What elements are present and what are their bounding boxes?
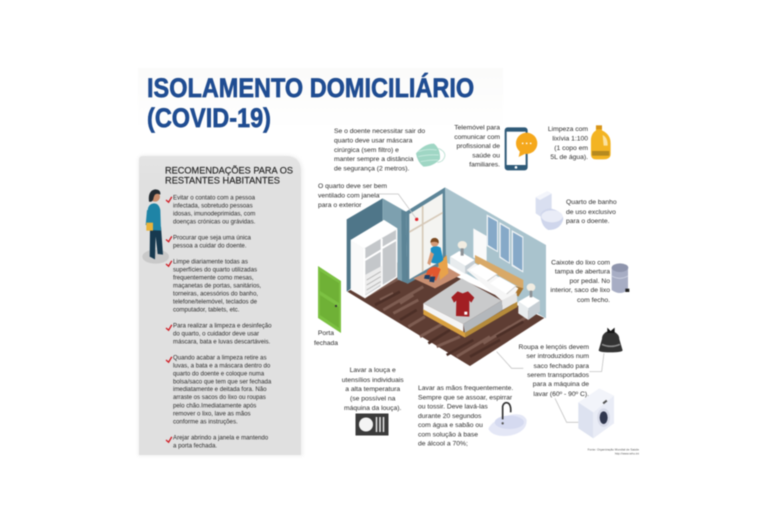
- icon: mobile phone with speech bubble: [506, 128, 537, 169]
- text: mobile phone: Telemóvel para: [454, 124, 500, 132]
- icon: garbage bag: [599, 328, 623, 352]
- recommendation 1: Evitar o contato com a pessoa: [173, 194, 256, 201]
- recommendation 3: superfícies do quarto utilizadas: [173, 266, 257, 274]
- text: wash hands: Sempre que se assoar, espirrar: [418, 395, 513, 402]
- recommendation 5: quarto do doente e coloque numa: [173, 370, 265, 377]
- text: pedal bin: com fecho.: [577, 297, 610, 304]
- recommendation 3: telefone/telemóvel, teclados de: [173, 298, 258, 305]
- recommendation 3: computador, tablets, etc.: [173, 306, 240, 314]
- text: wash hands: [418, 385, 513, 448]
- recommendation 2: Procurar que seja uma única: [173, 234, 252, 241]
- text: wash dishes: Lavar a louça e: [350, 367, 396, 374]
- icon: toilet: [536, 191, 563, 230]
- recommendation 5: arraste os sacos do lixo ou roupas: [173, 394, 266, 401]
- panel heading: [165, 166, 293, 186]
- panel: recommendations for other residents: [138, 155, 303, 456]
- text: exclusive bathroom: [566, 199, 617, 225]
- text: exclusive bathroom: para o doente.: [566, 218, 610, 225]
- icon: pedal bin: [612, 263, 629, 293]
- text: bleach cleaning: [548, 126, 588, 161]
- label: closed door: [314, 330, 338, 347]
- recommendation 4: máscara, bata e luvas descartáveis.: [173, 338, 271, 345]
- text: laundry: lavar (60º - 90º C).: [533, 391, 589, 398]
- text: mobile phone: profissional de: [456, 143, 500, 150]
- text: pedal bin: tampa de abertura: [555, 269, 610, 276]
- text: surgical mask advice: de segurança (2 metros).: [334, 166, 410, 172]
- text: wash hands: ou tossir. Deve lavá-las: [418, 404, 488, 411]
- text: room ventilation: para o exterior: [318, 202, 362, 209]
- text: bleach cleaning: Limpeza com: [548, 126, 588, 133]
- callout lines: [378, 194, 604, 422]
- icon: plate and cutlery: [356, 414, 388, 436]
- text: wash hands: de álcool a 70%;: [418, 441, 468, 448]
- right wall: [445, 187, 546, 318]
- recommendation 6: [166, 434, 269, 449]
- recommendation 1: doenças crónicas ou grávidas.: [173, 218, 256, 226]
- text: mobile phone: saúde ou: [472, 152, 500, 160]
- text: wash dishes: (se possível na: [350, 396, 396, 403]
- text: wash hands: com água e sabão ou: [418, 422, 483, 429]
- recommendation 5: bolsa/saco que tem que ser fechada: [173, 378, 272, 385]
- panel heading: RECOMENDAÇÕES PARA OS: [165, 166, 293, 176]
- text: surgical mask advice: quarto deve usar máscara: [334, 138, 413, 144]
- label: closed door: fechada: [314, 340, 338, 347]
- text: surgical mask advice: [334, 128, 425, 172]
- rug: [413, 265, 461, 288]
- text: surgical mask advice: manter sempre a distância: [334, 156, 414, 163]
- text: wash dishes: a alta temperatura: [345, 386, 400, 393]
- text: laundry: Roupa e lençóis devem: [518, 344, 589, 351]
- bathroom door: [473, 228, 487, 265]
- recommendation 3: torneiras, acessórios do banho,: [173, 290, 258, 298]
- recommendation 5: remover o lixo, lave as mãos: [173, 410, 251, 417]
- panel heading: RESTANTES HABITANTES: [165, 176, 280, 186]
- recommendation 3: [166, 259, 261, 314]
- icon: sink with faucet: [488, 403, 527, 436]
- text: pedal bin: Caixote do lixo com: [551, 260, 610, 267]
- source note: http://www.who.int: [615, 452, 639, 456]
- bed: [423, 255, 523, 338]
- recommendation 2: [166, 234, 252, 250]
- text: bleach cleaning: 5L de água).: [550, 154, 588, 161]
- text: bleach cleaning: (1 copo em: [554, 145, 588, 152]
- title: ISOLAMENTO DOMICILIÁRIO: [147, 73, 474, 103]
- text: wash hands: Lavar as mãos frequentemente.: [418, 385, 513, 392]
- wall windows: [487, 214, 523, 273]
- recommendation 2: pessoa a cuidar do doente.: [173, 242, 247, 250]
- recommendation 3: maçanetas de portas, sanitários,: [173, 282, 261, 290]
- recommendation 3: Limpe diariamente todas as: [173, 259, 248, 266]
- text: wash dishes: utensílios individuais: [342, 377, 404, 384]
- source note: [588, 448, 639, 456]
- recommendation 4: Para realizar a limpeza e desinfeção: [173, 323, 272, 330]
- recommendation 4: do quarto, o cuidador deve usar: [173, 330, 259, 337]
- text: wash hands: durante 20 segundos: [418, 413, 482, 420]
- text: wash hands: com solução à base: [418, 432, 478, 439]
- recommendation 5: luvas, a bata e a máscara dentro do: [173, 362, 271, 369]
- text: surgical mask advice: cirúrgica (sem filtro) e: [334, 147, 399, 154]
- left nightstand and lamp: [450, 241, 475, 274]
- window wall: [406, 187, 446, 284]
- text: room ventilation: O quarto deve ser bem: [318, 183, 387, 190]
- icon: surgical mask: [416, 144, 445, 167]
- label: closed door: Porta: [318, 330, 334, 337]
- recommendation 6: Arejar abrindo a janela e mantendo: [173, 434, 269, 441]
- recommendation 5: [166, 355, 272, 425]
- text: room ventilation: ventilado com janela: [318, 192, 380, 200]
- text: mobile phone: comunicar com: [454, 134, 500, 141]
- text: pedal bin: [550, 260, 610, 304]
- recommendation 1: infectada, sobretudo pessoas: [173, 202, 253, 210]
- wardrobe: [351, 220, 397, 298]
- text: laundry: ser introduzidos num: [526, 353, 589, 360]
- recommendation 5: Quando acabar a limpeza retire as: [173, 355, 266, 362]
- text: exclusive bathroom: Quarto de banho: [566, 199, 617, 206]
- title: [147, 73, 474, 133]
- text: wash dishes: máquina da louça).: [344, 405, 402, 412]
- text: pedal bin: por pedal. No: [569, 278, 610, 285]
- text: laundry: saco fechado para: [533, 363, 589, 370]
- recommendation 1: [166, 194, 256, 226]
- icon: bleach bottle: [591, 125, 611, 159]
- text: mobile phone: familiares.: [469, 162, 500, 168]
- person sitting on chair: [424, 238, 448, 282]
- recommendation 5: imediatamente e deitada fora. Não: [173, 386, 267, 393]
- text: bleach cleaning: lixívia 1:100: [552, 136, 588, 143]
- recommendation 6: a porta fechada.: [173, 442, 217, 449]
- recommendation 4: [166, 323, 272, 345]
- icon: washing machine: [578, 388, 614, 438]
- text: mobile phone: [454, 124, 500, 168]
- recommendation 5: pelo chão.Imediatamente após: [173, 402, 256, 409]
- text: exclusive bathroom: de uso exclusivo: [566, 209, 616, 216]
- text: laundry: serem transportados: [527, 372, 590, 379]
- text: surgical mask advice: Se o doente necessitar sair do: [334, 128, 425, 135]
- source note: Fonte: Organização Mundial de Saúde: [588, 448, 639, 452]
- recommendation 1: idosas, imunodeprimidas, com: [173, 210, 255, 218]
- text: laundry: [518, 344, 590, 398]
- icon: standing caregiver figure: [142, 189, 169, 264]
- text: pedal bin: interior, saco de lixo: [550, 287, 610, 294]
- icon: closed green door: [318, 266, 341, 333]
- recommendation 5: conforme as instruções.: [173, 418, 238, 425]
- text: wash dishes: [342, 367, 404, 412]
- title: (COVID-19): [147, 104, 271, 133]
- red t-shirt on the bed: [451, 291, 474, 317]
- right nightstand and lamp: [518, 283, 540, 320]
- floor: [347, 255, 544, 366]
- text: laundry: para a máquina de: [533, 381, 589, 388]
- left wall: [347, 198, 407, 292]
- text: room ventilation: [318, 183, 387, 209]
- recommendation 3: frequentemente como mesas,: [173, 274, 254, 282]
- illustration: isometric bedroom: [347, 187, 546, 366]
